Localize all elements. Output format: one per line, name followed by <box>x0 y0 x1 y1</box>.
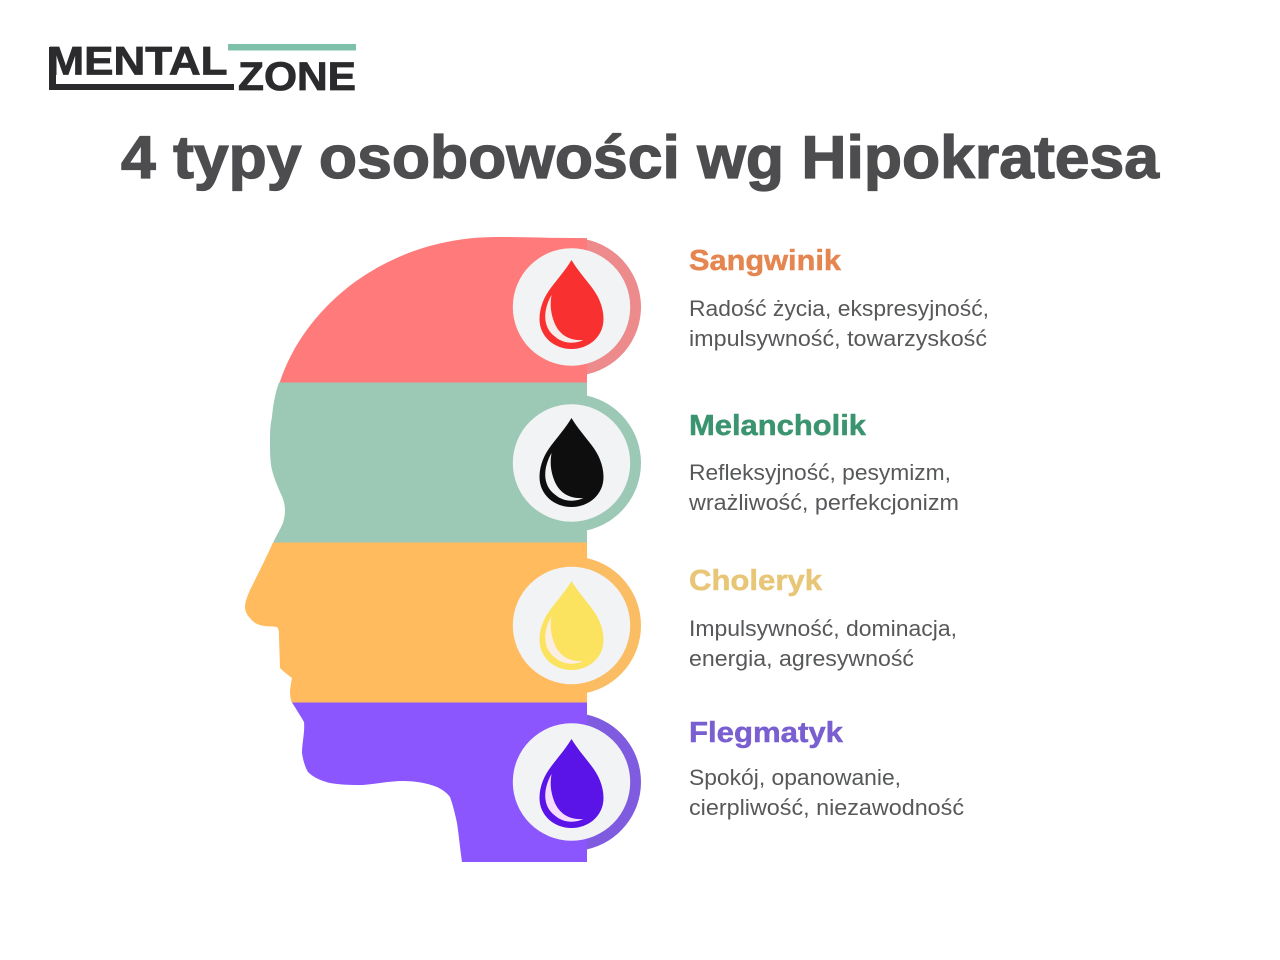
text block: Melancholik: Melancholik <box>689 410 867 442</box>
text block: Flegmatyk: Flegmatyk <box>689 717 844 749</box>
icon: red blood drop <box>513 248 630 366</box>
text block: Flegmatyk: cierpliwość, niezawodność <box>689 795 964 820</box>
logo: Mental Zone <box>48 40 356 99</box>
head band: Melancholik (green) <box>270 382 641 543</box>
title: 4 typy osobowości wg Hipokratesa <box>121 124 1160 191</box>
icon: yellow bile drop <box>513 567 630 684</box>
text block: Choleryk: Choleryk <box>689 565 823 597</box>
head silhouette <box>245 237 641 862</box>
text block: Flegmatyk: Spokój, opanowanie, <box>689 765 901 790</box>
head band: Choleryk (orange) <box>245 542 641 703</box>
head band: Sangwinik (red) <box>280 237 641 383</box>
text block: Melancholik: Refleksyjność, pesymizm, <box>689 460 951 485</box>
icon: purple phlegm drop <box>513 723 630 841</box>
text block: Sangwinik: Sangwinik <box>689 245 842 277</box>
text block: Melancholik: wrażliwość, perfekcjonizm <box>688 490 959 515</box>
logo: Mental Zone: ZONE <box>238 55 356 99</box>
text block: Choleryk: energia, agresywność <box>689 646 914 671</box>
logo: Mental Zone: MENTAL <box>48 40 228 84</box>
text block: Sangwinik: Radość życia, ekspresyjność, <box>689 296 989 321</box>
text block: Melancholik <box>688 410 959 515</box>
text block: Choleryk: Impulsywność, dominacja, <box>689 616 957 641</box>
icon: black bile drop <box>513 404 630 522</box>
text block: Sangwinik <box>689 245 989 351</box>
text block: Flegmatyk <box>689 717 964 820</box>
text block: Choleryk <box>689 565 957 671</box>
head band: Flegmatyk (purple) <box>292 702 641 862</box>
text block: Sangwinik: impulsywność, towarzyskość <box>689 326 987 351</box>
